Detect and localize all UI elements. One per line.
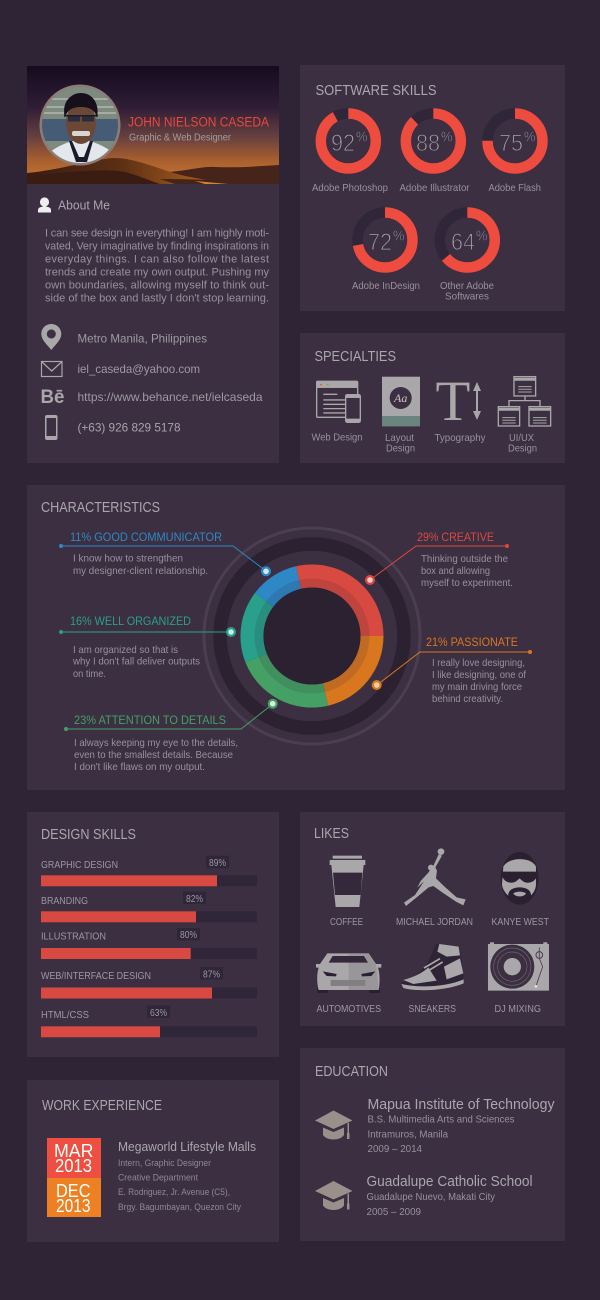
name: JOHN NIELSON CASEDA (128, 115, 269, 130)
donut: other (440, 212, 495, 268)
icon: graduation cap (315, 1110, 352, 1140)
heading: WORK EXPERIENCE (42, 1098, 162, 1114)
software labels: Adobe Illustrator (400, 182, 470, 194)
callout: communicator (59, 530, 271, 577)
software labels: Adobe Photoshop (312, 182, 388, 194)
panel: design skills (27, 812, 279, 1057)
callout: attention to details: even to the smallest details. Because (74, 749, 233, 761)
donut: illustrator: 88 (416, 130, 440, 157)
panel: profile (27, 66, 279, 463)
callout: passionate: 21% PASSIONATE (426, 635, 518, 649)
callout: organized: I am organized so that is (73, 644, 178, 656)
software labels: Other Adobe (440, 280, 494, 292)
specialty labels: UI/UX (509, 432, 534, 444)
like labels: COFFEE (330, 917, 363, 928)
website: https://www.behance.net/ielcaseda (78, 390, 263, 404)
callout: attention to details (64, 699, 278, 773)
heading: SPECIALTIES (314, 349, 396, 365)
panel: likes (300, 812, 565, 1026)
bar: html/css (41, 1006, 257, 1037)
callout: communicator: my designer-client relationship. (73, 565, 208, 577)
school: mapua (368, 1097, 555, 1155)
icon: web design (317, 381, 360, 422)
callout: attention to details: 23% ATTENTION TO DETAILS (74, 713, 226, 727)
callout: organized (59, 614, 236, 680)
software labels: Softwares (445, 291, 489, 303)
like labels: SNEAKERS (408, 1004, 456, 1015)
icon: kanye west (501, 852, 539, 905)
callout: communicator: I know how to strengthen (73, 552, 183, 564)
job details: Creative Department (118, 1172, 198, 1184)
like labels (316, 917, 549, 1015)
school: mapua: Intramuros, Manila (368, 1129, 448, 1141)
icon: coffee (330, 856, 365, 907)
bar: html/css: 63% (150, 1008, 167, 1019)
school: mapua: Mapua Institute of Technology (368, 1097, 555, 1113)
panel: work experience (27, 1080, 279, 1242)
callout: attention to details: I always keeping my eye to the details, (74, 737, 238, 749)
callout: organized: why I don't fall deliver outputs (72, 656, 200, 668)
bar: illustration: ILLUSTRATION (41, 932, 106, 942)
callout: passionate: my main driving force (432, 681, 522, 693)
callout: passionate: I really love designing, (432, 657, 525, 669)
like labels: AUTOMOTIVES (316, 1004, 381, 1015)
school: mapua: B.S. Multimedia Arts and Sciences (368, 1114, 514, 1126)
date badge: 2013 (56, 1196, 90, 1216)
like labels: DJ MIXING (494, 1004, 541, 1015)
bar: branding: BRANDING (41, 896, 88, 907)
school: guadalupe (366, 1174, 532, 1218)
icon: sneakers (401, 944, 464, 990)
specialty labels: Web Design (312, 432, 363, 444)
donut: flash: % (524, 128, 536, 146)
school: mapua: 2009 – 2014 (368, 1143, 422, 1155)
panel: specialties (300, 333, 565, 463)
callout: creative (365, 530, 513, 589)
school: guadalupe: Guadalupe Catholic School (366, 1174, 532, 1190)
job details: E. Rodriguez, Jr. Avenue (C5), (118, 1187, 230, 1198)
phone: (+63) 926 829 5178 (78, 421, 181, 435)
specialty labels: Layout (385, 432, 414, 444)
callout: passionate: I like designing, one of (432, 669, 526, 681)
like labels: MICHAEL JORDAN (396, 917, 473, 928)
job details: Brgy. Bagumbayan, Quezon City (118, 1202, 241, 1213)
about text: vated, Very imaginative by finding inspirations in (45, 241, 269, 253)
profile avatar (40, 84, 120, 170)
specialty labels: Typography (434, 432, 486, 444)
donut: indesign: % (393, 228, 404, 244)
about text: side of the box and lastly I don't stop learning. (45, 292, 269, 304)
donut: flash (488, 114, 542, 168)
location: Metro Manila, Philippines (78, 332, 207, 346)
donut: flash: 75 (499, 130, 523, 157)
donut: illustrator (406, 114, 461, 168)
bar: graphic design (41, 856, 257, 886)
icon: mail (42, 362, 62, 376)
date badge: DEC (56, 1181, 90, 1201)
icon: layout design (382, 377, 420, 426)
bar: web/interface design: WEB/INTERFACE DESIGN (41, 971, 151, 982)
icon: behance: Bē (40, 387, 64, 408)
donut: photoshop: % (356, 128, 368, 146)
like labels: KANYE WEST (492, 917, 549, 928)
icon: person (38, 197, 51, 212)
software labels: Adobe InDesign (352, 280, 420, 292)
callout: creative: Thinking outside the (421, 553, 508, 565)
job details: Megaworld Lifestyle Malls (118, 1140, 256, 1154)
about text: trends and create my own output. Pushing my (45, 267, 270, 279)
software labels: Adobe Flash (488, 182, 541, 194)
date badge (47, 1138, 101, 1217)
bar: html/css: HTML/CSS (41, 1010, 89, 1021)
bar: graphic design: 89% (209, 858, 226, 869)
date badge: 2013 (55, 1156, 92, 1176)
job details (118, 1140, 256, 1213)
donut: other: % (476, 228, 488, 244)
specialty labels: Design (508, 442, 537, 454)
donut: indesign: 72 (368, 229, 392, 256)
bar: web/interface design: 87% (203, 970, 220, 980)
specialty labels (312, 432, 537, 455)
callout: creative: myself to experiment. (421, 577, 513, 589)
donut: illustrator: % (441, 128, 452, 146)
icon: typography: T (436, 370, 470, 433)
icon: dj mixing (488, 942, 549, 991)
icon: michael jordan (404, 848, 466, 906)
icon: location pin (41, 324, 61, 350)
callout: organized: 16% WELL ORGANIZED (70, 614, 191, 628)
callout: creative: 29% CREATIVE (417, 530, 494, 544)
donut: photoshop (321, 114, 376, 168)
bar: branding (41, 892, 257, 922)
bar: illustration (41, 928, 257, 959)
panel: education (300, 1048, 565, 1241)
bar: illustration: 80% (180, 930, 197, 941)
bar: web/interface design (41, 967, 257, 998)
donut: other: 64 (451, 229, 475, 256)
specialty labels: Design (386, 443, 415, 455)
about text: I can see design in everything! I am highly moti- (45, 228, 269, 240)
school: guadalupe: 2005 – 2009 (366, 1206, 421, 1218)
job title: Graphic & Web Designer (129, 132, 232, 144)
email: iel_caseda@yahoo.com (78, 362, 200, 376)
icon: automotives (316, 953, 381, 993)
callout: organized: on time. (73, 668, 106, 680)
donut: indesign (358, 212, 412, 268)
heading: SOFTWARE SKILLS (316, 83, 436, 99)
icon: phone (45, 415, 58, 440)
about me heading: About Me (58, 198, 110, 213)
header photo banner (27, 66, 279, 184)
about text (45, 228, 270, 304)
callout: attention to details: I don't like flaws on my output. (74, 761, 205, 773)
panel: characteristics (27, 485, 565, 790)
bar: graphic design: GRAPHIC DESIGN (41, 860, 118, 871)
icon: ui/ux (498, 377, 551, 426)
bar: branding: 82% (186, 894, 203, 905)
about text: everyday things. I can also follow the latest (45, 254, 269, 266)
callout: passionate: behind creativity. (432, 693, 503, 705)
software labels (312, 182, 541, 303)
date badge: MAR (54, 1141, 94, 1161)
icon: graduation cap (315, 1181, 352, 1210)
donut: photoshop: 92 (331, 130, 355, 157)
donut chart (204, 528, 420, 744)
callout: creative: box and allowing (421, 565, 490, 577)
job details: Intern, Graphic Designer (118, 1158, 211, 1169)
icon: layout design: Aa (393, 391, 407, 405)
about text: own boundaries, allowing myself to think out- (45, 280, 269, 292)
callout: communicator: 11% GOOD COMMUNICATOR (70, 530, 222, 544)
heading: DESIGN SKILLS (41, 827, 136, 843)
panel: software skills (300, 65, 565, 311)
school: guadalupe: Guadalupe Nuevo, Makati City (366, 1191, 496, 1203)
callout: passionate (372, 635, 532, 705)
heading: LIKES (314, 826, 349, 842)
heading: CHARACTERISTICS (41, 500, 160, 516)
heading: EDUCATION (315, 1064, 388, 1080)
